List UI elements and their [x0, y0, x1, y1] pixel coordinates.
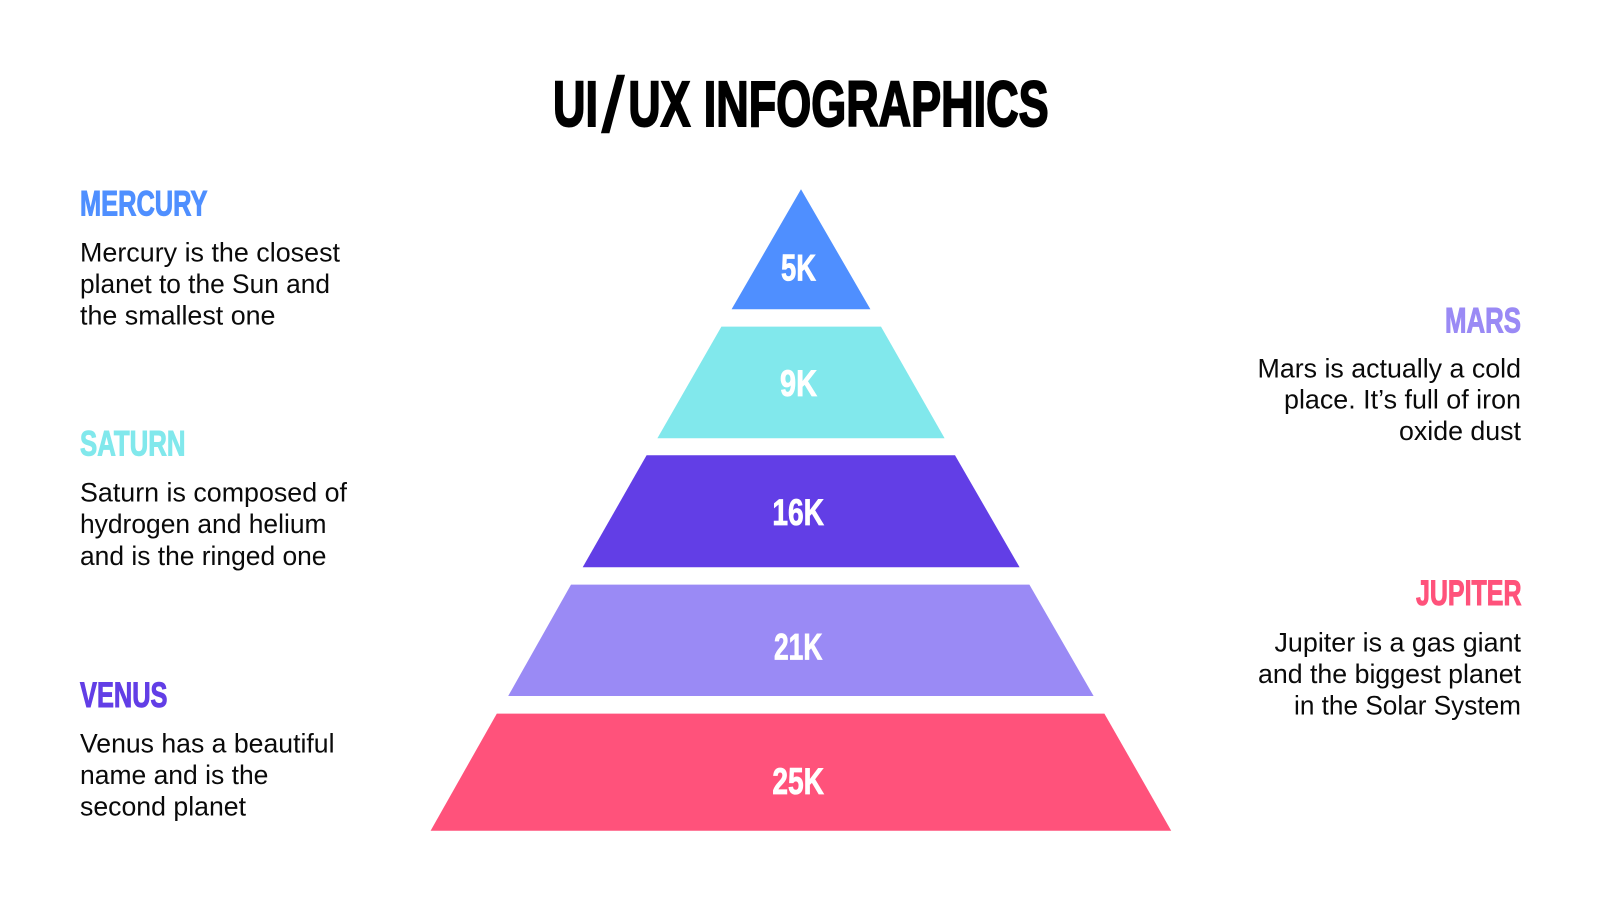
text block: Venus description: Venus has a beautiful — [80, 728, 334, 758]
panel: Venus — [80, 676, 334, 822]
panel: Mercury — [80, 185, 341, 331]
pyramid tier: 9K: 9K — [780, 363, 817, 404]
title: UI — [553, 68, 598, 140]
text block: Venus description: second planet — [80, 792, 247, 822]
text block: Jupiter description: and the biggest planet — [1258, 659, 1522, 689]
text block: Mercury description: Mercury is the closest — [80, 238, 341, 268]
pyramid tier: 16K — [583, 455, 1020, 567]
heading: Mars: MARS — [1445, 301, 1521, 340]
text block: Mars description: Mars is actually a cold — [1258, 353, 1521, 383]
pyramid tier: 9K — [657, 327, 945, 438]
pyramid tier: 21K — [508, 585, 1094, 696]
heading: Mercury: MERCURY — [80, 185, 208, 224]
pyramid tier: 5K — [732, 189, 870, 309]
heading: Jupiter: JUPITER — [1416, 574, 1522, 613]
text block: Saturn description — [80, 478, 348, 571]
text block: Venus description: name and is the — [80, 760, 268, 790]
heading: Saturn: SATURN — [80, 424, 186, 464]
text block: Mercury description: the smallest one — [80, 301, 276, 331]
title: INFOGRAPHICS — [704, 68, 1049, 140]
pyramid tier: 25K — [431, 714, 1171, 831]
text block: Jupiter description: in the Solar System — [1294, 690, 1521, 720]
text block: Mars description: place. It’s full of iron — [1284, 385, 1521, 415]
pyramid chart — [431, 189, 1171, 831]
text block: Saturn description: hydrogen and helium — [80, 509, 326, 539]
panel: Mars — [1258, 301, 1522, 446]
title: UX — [628, 68, 691, 140]
panel: Saturn — [80, 424, 348, 571]
text block: Mars description: oxide dust — [1399, 416, 1522, 446]
pyramid tier: 16K: 16K — [772, 492, 824, 533]
text block: Jupiter description: Jupiter is a gas giant — [1274, 628, 1522, 658]
pyramid tier: 5K: 5K — [781, 248, 816, 288]
title — [553, 63, 1049, 148]
text block: Jupiter description — [1258, 628, 1522, 720]
pyramid tier: 25K: 25K — [772, 761, 824, 802]
title: / — [602, 63, 624, 148]
pyramid tier: 21K: 21K — [774, 627, 823, 668]
text block: Mercury description: planet to the Sun and — [80, 269, 330, 299]
heading: Venus: VENUS — [80, 676, 168, 715]
text block: Mars description — [1258, 353, 1522, 446]
text block: Saturn description: Saturn is composed of — [80, 478, 348, 508]
panel: Jupiter — [1258, 574, 1522, 720]
text block: Venus description — [80, 728, 334, 822]
text block: Saturn description: and is the ringed one — [80, 541, 326, 571]
text block: Mercury description — [80, 238, 341, 331]
